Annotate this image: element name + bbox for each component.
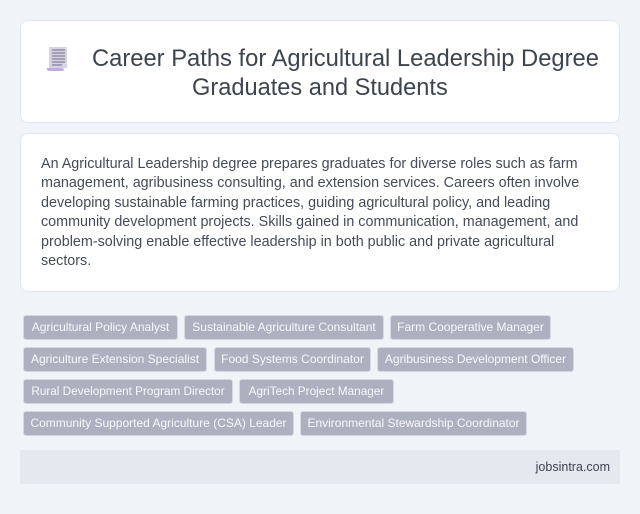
tag: sustainable consultant: [184, 315, 384, 340]
description text: community development projects. Skills gained in communication, management, and: [41, 214, 578, 230]
description text: management, agribusiness consulting, and extension services. Careers often involve: [41, 175, 579, 191]
tag: food systems: [214, 347, 371, 372]
tag: policy analyst: [23, 315, 178, 340]
tag: extension specialist: Agriculture Extension Specialist: [31, 352, 199, 366]
tag: agritech manager: AgriTech Project Manager: [249, 384, 384, 398]
tag: rural director: Rural Development Program Director: [31, 385, 225, 398]
tag: agritech manager: [239, 379, 394, 404]
description text: problem-solving enable effective leadership in both public and private agricultural: [41, 234, 554, 250]
tag: stewardship coordinator: Environmental Stewardship Coordinator: [307, 416, 520, 430]
tag: CSA leader: Community Supported Agriculture (CSA) Leader: [30, 416, 287, 430]
tag: extension specialist: [23, 347, 207, 372]
title: Career Paths for Agricultural Leadership Degree: [92, 45, 599, 72]
footer bar: [20, 450, 620, 484]
title: [92, 45, 599, 101]
tag: CSA leader: [23, 411, 294, 436]
tag: sustainable consultant: Sustainable Agriculture Consultant: [192, 320, 376, 334]
description text: developing sustainable farming practices, guiding agricultural policy, and leading: [41, 194, 550, 210]
description text: [41, 156, 579, 269]
description card: [20, 133, 620, 292]
career tags: [23, 315, 574, 436]
tag: stewardship coordinator: [300, 411, 527, 436]
description text: sectors.: [41, 253, 91, 269]
tag: policy analyst: Agricultural Policy Analyst: [32, 320, 169, 334]
title: Graduates and Students: [192, 75, 448, 101]
footer text: jobsintra.com: [536, 460, 610, 474]
tag: rural director: [23, 379, 233, 404]
icon: document scroll: [46, 47, 67, 71]
tag: agribusiness officer: Agribusiness Development Officer: [385, 352, 566, 366]
tag: food systems: Food Systems Coordinator: [221, 352, 364, 366]
header card: [20, 20, 620, 123]
description text: An Agricultural Leadership degree prepares graduates for diverse roles such as farm: [41, 156, 578, 172]
tag: cooperative manager: [390, 315, 551, 340]
tag: cooperative manager: Farm Cooperative Manager: [397, 320, 544, 334]
tag: agribusiness officer: [377, 347, 574, 372]
